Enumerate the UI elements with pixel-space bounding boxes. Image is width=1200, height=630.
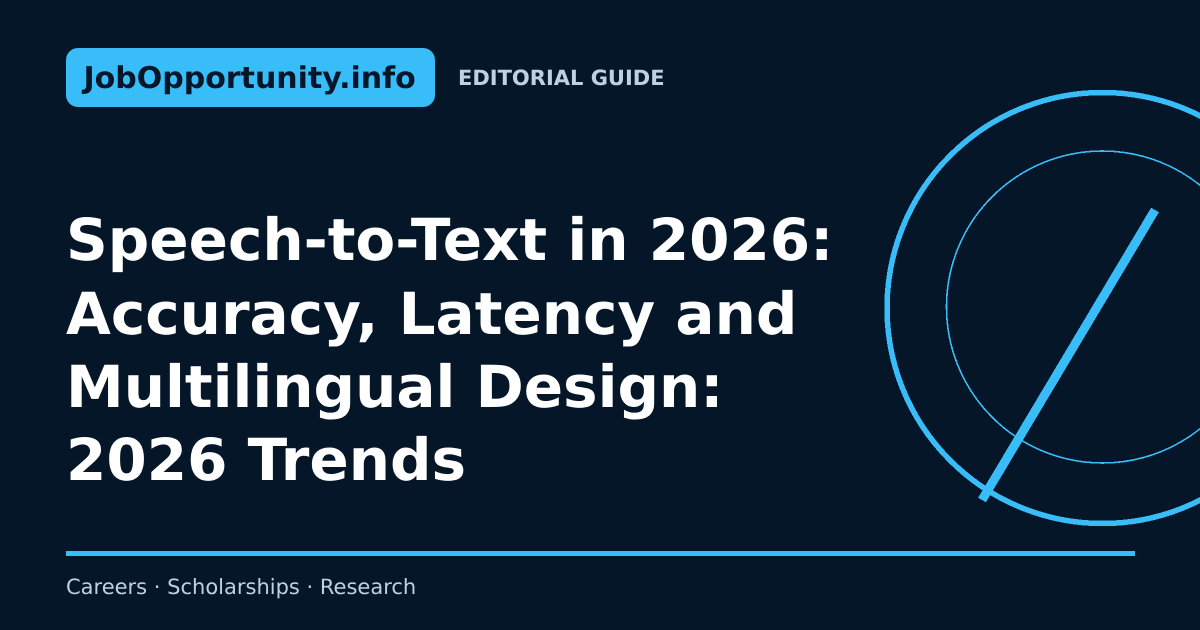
- title: Accuracy, Latency and: [66, 280, 797, 348]
- brand name: JobOpportunity.info: [84, 61, 416, 96]
- outer ring: [887, 92, 1200, 524]
- brand badge: [66, 48, 435, 107]
- inner ring: [946, 151, 1200, 463]
- kicker label: EDITORIAL GUIDE: [458, 66, 665, 90]
- diagonal slash: [982, 210, 1155, 500]
- footer text: Careers · Scholarships · Research: [66, 575, 416, 599]
- title: Multilingual Design:: [66, 353, 723, 421]
- title: [66, 206, 833, 494]
- title: Speech-to-Text in 2026:: [66, 206, 833, 274]
- title: 2026 Trends: [66, 426, 466, 494]
- footer rule: [66, 551, 1135, 556]
